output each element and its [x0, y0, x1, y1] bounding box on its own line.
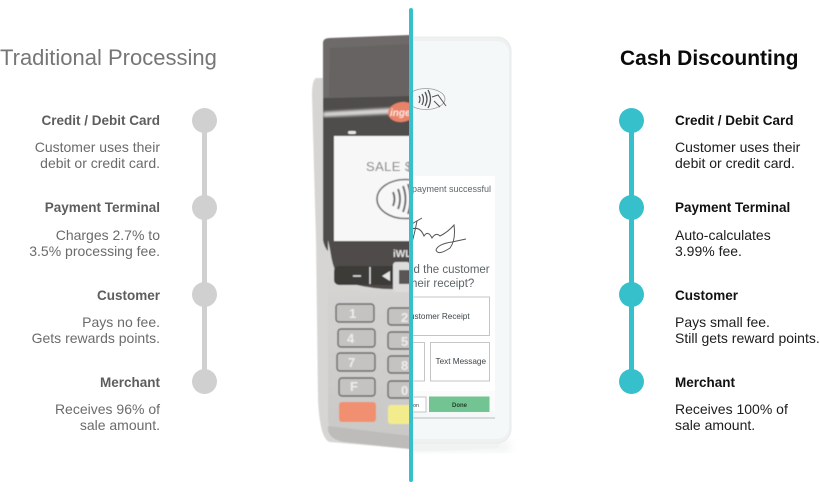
contactless hand icon [413, 88, 446, 110]
heading: traditional processing: Traditional Processing [0, 45, 217, 70]
right step 4 label: Merchant [675, 375, 735, 390]
terminal: traditional card machine: 1 [349, 306, 356, 321]
screen text: heir receipt? [411, 278, 474, 290]
right step 3 label: Customer [675, 288, 738, 303]
left step 4 text: Receives 96% of [55, 401, 160, 417]
terminal: tablet payment device: Text Message [436, 357, 486, 366]
terminal: traditional card machine: 8 [401, 358, 408, 373]
screen text: ld the customer [411, 264, 490, 276]
left step 1 label: Credit / Debit Card [41, 113, 160, 128]
terminal: traditional card machine: 4 [347, 331, 355, 346]
left step 4 text: sale amount. [80, 417, 160, 433]
terminal: traditional card machine: 5 [401, 334, 408, 349]
terminal: traditional card machine: iWL [393, 249, 411, 260]
timeline: traditional [192, 108, 217, 394]
right step 4 text: sale amount. [675, 417, 755, 433]
terminal: traditional card machine: 0 [401, 383, 408, 398]
left step 1 text [35, 139, 160, 171]
right step 1 text: debit or credit card. [675, 155, 795, 171]
screen text: payment successful [412, 184, 491, 194]
right step 4 text: Receives 100% of [675, 401, 788, 417]
left step 4 label: Merchant [100, 375, 160, 390]
right step 3 text: Pays small fee. [675, 314, 770, 330]
right step 1 text [675, 139, 800, 171]
left step 3 text: Gets rewards points. [32, 330, 160, 346]
left step 3 text [32, 314, 160, 346]
heading: cash discounting: Cash Discounting [620, 47, 799, 70]
terminal: tablet payment device: on [413, 403, 419, 409]
screen text [411, 184, 491, 290]
terminal: tablet payment device [413, 36, 512, 452]
left step 1 text: debit or credit card. [40, 155, 160, 171]
left step 1 text: Customer uses their [35, 139, 160, 155]
divider: centre line [408, 8, 413, 482]
left step 2 text: 3.5% processing fee. [29, 243, 160, 259]
terminal: traditional card machine: 2 [401, 310, 408, 325]
right step 2 text: Auto-calculates [675, 227, 771, 243]
terminal: traditional card machine: inge [390, 108, 411, 119]
terminal: tablet payment device: ustomer Receipt [410, 312, 470, 321]
left step 3 label: Customer [97, 288, 160, 303]
right step 4 text [675, 401, 788, 433]
right step 2 text [675, 227, 771, 259]
receipt options [413, 296, 490, 412]
terminal: traditional card machine [312, 34, 409, 450]
left step 2 label: Payment Terminal [45, 200, 160, 215]
right step 3 text: Still gets reward points. [675, 330, 820, 346]
done button [429, 396, 490, 412]
keypad keys [336, 304, 418, 398]
left step 2 text [29, 227, 160, 259]
right step 1 label: Credit / Debit Card [675, 113, 794, 128]
signature [410, 218, 466, 253]
terminal: traditional card machine: F [350, 379, 358, 394]
illustration: payment terminals split view [312, 34, 512, 452]
left step 2 text: Charges 2.7% to [56, 227, 160, 243]
right step 1 text: Customer uses their [675, 139, 800, 155]
left step 3 text: Pays no fee. [82, 314, 160, 330]
timeline: cash discounting [619, 108, 644, 394]
left step 4 text [55, 401, 160, 433]
right step 2 label: Payment Terminal [675, 200, 790, 215]
right step 2 text: 3.99% fee. [675, 243, 742, 259]
terminal: traditional card machine: SALE $ [366, 159, 413, 174]
terminal: tablet payment device: Done [452, 403, 468, 409]
right step 3 text [675, 314, 820, 346]
terminal: traditional card machine: 7 [348, 355, 355, 370]
